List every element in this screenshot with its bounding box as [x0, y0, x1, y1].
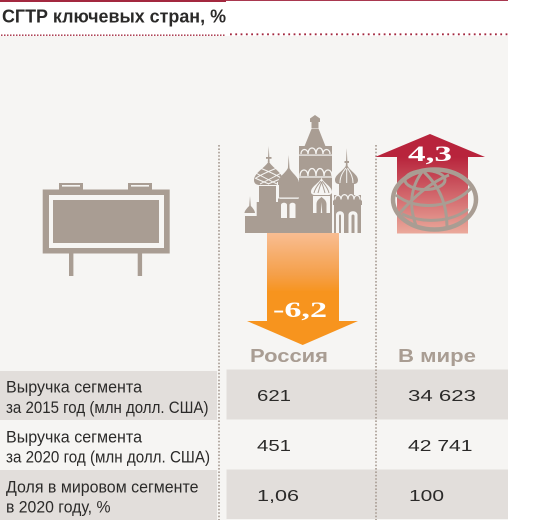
arrow: Russia down: [247, 233, 358, 345]
middle dome tower: [278, 155, 300, 233]
icon: cathedral: [244, 115, 362, 233]
right dome tower: [333, 148, 362, 233]
table row 3: [0, 470, 508, 520]
row labels: за 2015 год (млн долл. США): [6, 399, 208, 417]
world values: [408, 388, 476, 505]
arrow value: -6,2: [273, 297, 327, 322]
row labels: в 2020 году, %: [6, 498, 111, 516]
Russia values: [257, 388, 299, 505]
icon: globe: [393, 170, 476, 230]
central tower: [299, 115, 333, 233]
row labels: Выручка сегмента: [6, 378, 143, 396]
arrow: world up: [375, 134, 485, 234]
small left tower: [244, 196, 257, 233]
world values: 42 741: [408, 438, 473, 455]
column heading: world: В мире: [398, 346, 476, 366]
row labels: [6, 378, 210, 516]
world values: 34 623: [408, 388, 476, 405]
Russia values: 1,06: [257, 488, 299, 505]
column divider: Russia left: [218, 145, 220, 520]
Russia values: 621: [257, 388, 291, 405]
top rule: [0, 0, 508, 2]
world values: 100: [409, 488, 444, 505]
title: СГТР ключевых стран, %: [2, 6, 226, 27]
white dome: [311, 178, 332, 213]
icon: billboard: [43, 183, 170, 276]
dotted rule: [1, 33, 508, 36]
column heading: Russia: Россия: [250, 346, 328, 366]
Russia values: 451: [257, 438, 291, 455]
column divider: Russia right: [375, 145, 377, 520]
row labels: Доля в мировом сегменте: [6, 478, 198, 496]
row labels: Выручка сегмента: [6, 428, 143, 446]
table row 1: [0, 370, 508, 420]
row labels: за 2020 год (млн долл. США): [6, 449, 210, 467]
lattice dome tower: [254, 146, 283, 233]
arrow value: 4,3: [408, 141, 452, 166]
